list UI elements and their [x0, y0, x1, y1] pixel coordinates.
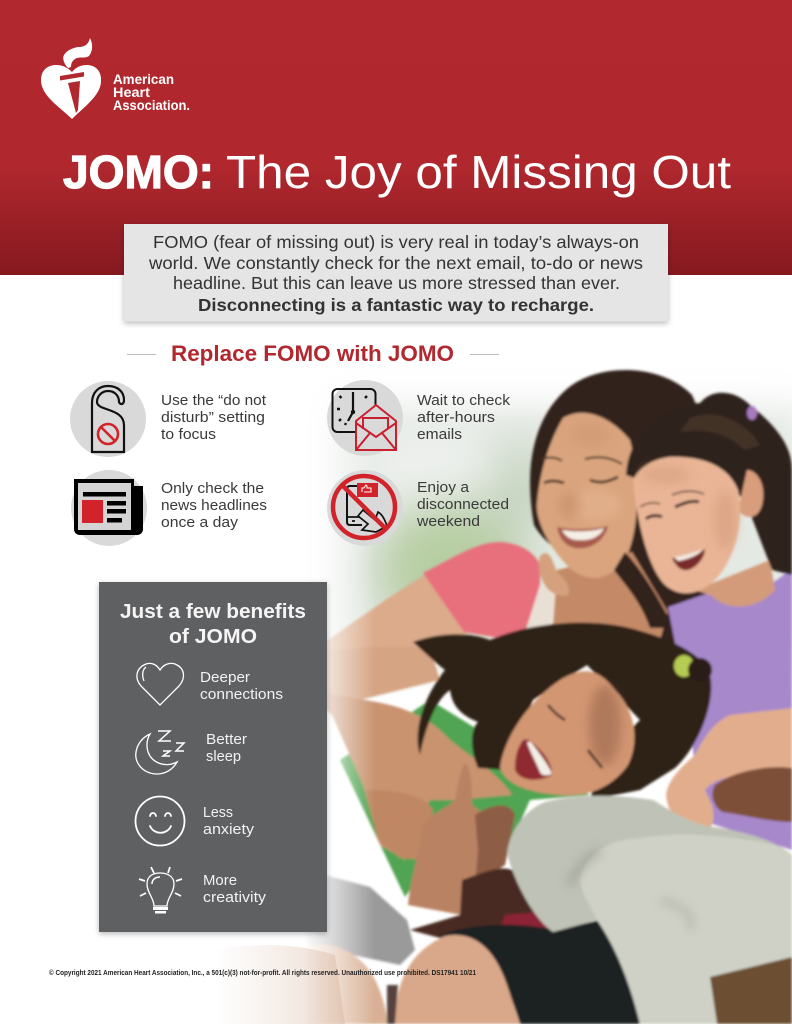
heading: Replace FOMO with JOMO: Replace FOMO with JOMO [171, 341, 454, 366]
daughter one ear [738, 470, 763, 517]
daughter one arm and hand [666, 708, 792, 832]
panel heading [120, 600, 306, 648]
icon: clock and envelope [332, 389, 396, 450]
mother lower arm [327, 695, 514, 862]
photo backdrop [320, 400, 792, 660]
benefit: deeper connections: Deeper [200, 670, 250, 686]
benefit: less anxiety: anxiety [203, 822, 255, 838]
title: The Joy of Missing Out [226, 146, 731, 198]
mother neck and chest [552, 552, 668, 640]
daughter one neck [695, 560, 775, 607]
daughter hand on mother shoulder [539, 553, 569, 596]
dark hand [712, 767, 792, 822]
photo: mother and two daughters laughing [215, 360, 792, 1024]
daughter one hair [626, 393, 792, 575]
benefit: less anxiety [136, 796, 255, 846]
tip: after-hours emails: after-hours [417, 410, 495, 426]
girl two hair [413, 623, 711, 800]
intro panel [124, 224, 668, 322]
benefit: less anxiety: Less [203, 805, 233, 821]
mother brows, eyes, mouth [541, 457, 622, 464]
knees [395, 935, 520, 1024]
mother arm [306, 575, 470, 665]
title: JOMO: [63, 146, 214, 198]
benefit: more creativity [139, 867, 267, 914]
logo: American Heart Association: American [113, 72, 174, 87]
mother upper forearm [327, 651, 441, 701]
benefit: more creativity: creativity [203, 890, 267, 906]
hair bobble [674, 655, 694, 677]
tip: disconnected weekend: Enjoy a [417, 480, 470, 496]
brown furniture [710, 957, 792, 1024]
tip: disconnected weekend: disconnected [417, 497, 509, 513]
panel heading: Just a few benefits [120, 600, 306, 623]
trouser crease shading [570, 850, 600, 885]
tip: do not disturb [70, 381, 266, 457]
grey trousers [506, 793, 790, 934]
tip: do not disturb: Use the “do not [161, 393, 266, 409]
grey shorts [306, 870, 415, 965]
black shorts [437, 920, 640, 1024]
intro panel: headline. But this can leave us more stressed than ever. [173, 273, 620, 293]
girl two face [500, 671, 634, 795]
benefit: better sleep [136, 731, 247, 774]
panel heading: of JOMO [169, 625, 257, 648]
green top [340, 700, 590, 897]
benefit: better sleep: sleep [206, 749, 241, 765]
intro panel: world. We constantly check for the next email, to-do or news [148, 253, 643, 273]
copyright: © Copyright 2021 American Heart Association, Inc., a 501(c)(3) not-for-profit. All rights reserved. Unauthorized use prohibited. DS17941 10/21 [49, 968, 476, 977]
dark area between [410, 868, 555, 938]
tip: news headlines [71, 470, 267, 546]
tip: after-hours emails: Wait to check [417, 393, 511, 409]
mother hair [530, 370, 725, 650]
logo: American Heart Association: Association. [113, 98, 190, 113]
backdrop fade top [250, 360, 792, 420]
tip: do not disturb: disturb” setting [161, 410, 265, 426]
daughter one eyes and mouth [646, 501, 699, 519]
tip: news headlines: once a day [161, 515, 239, 531]
tip: disconnected weekend [327, 470, 509, 546]
faded knee bottom left [240, 945, 345, 1024]
intro panel: FOMO (fear of missing out) is very real in today’s always-on [153, 232, 639, 252]
mother hair strand over neck [614, 552, 674, 628]
tip: after-hours emails: emails [417, 427, 462, 443]
tip: news headlines: Only check the [161, 481, 264, 497]
girl two eyes and mouth [548, 705, 602, 768]
mother face [537, 413, 637, 578]
icon: crossed-out phone [333, 476, 395, 538]
pink shirt [423, 542, 540, 642]
icon: door hanger [92, 386, 124, 452]
benefit: better sleep: Better [206, 732, 247, 748]
mother cheek and nose light [579, 492, 616, 517]
logo: American Heart Association: Heart [113, 85, 151, 100]
purple shirt [668, 568, 792, 850]
white fade left [304, 415, 372, 1024]
people [306, 370, 792, 1024]
logo: American Heart Association [41, 38, 190, 119]
intro panel: Disconnecting is a fantastic way to recharge. [198, 295, 594, 315]
tip: disconnected weekend: weekend [416, 514, 480, 530]
fist and pointing hand [365, 790, 433, 860]
benefit: deeper connections: connections [200, 687, 283, 703]
benefit: deeper connections [137, 663, 283, 705]
tip: do not disturb: to focus [161, 427, 216, 443]
icon: newspaper [74, 479, 143, 535]
panel: benefits of JOMO [99, 582, 327, 932]
tip: news headlines: news headlines [161, 498, 267, 514]
tip: after-hours emails [327, 380, 511, 456]
header band [0, 0, 792, 275]
benefit: more creativity: More [203, 873, 237, 889]
white undershirt [525, 584, 554, 630]
daughter one face [633, 457, 740, 593]
hair tie [747, 406, 757, 420]
